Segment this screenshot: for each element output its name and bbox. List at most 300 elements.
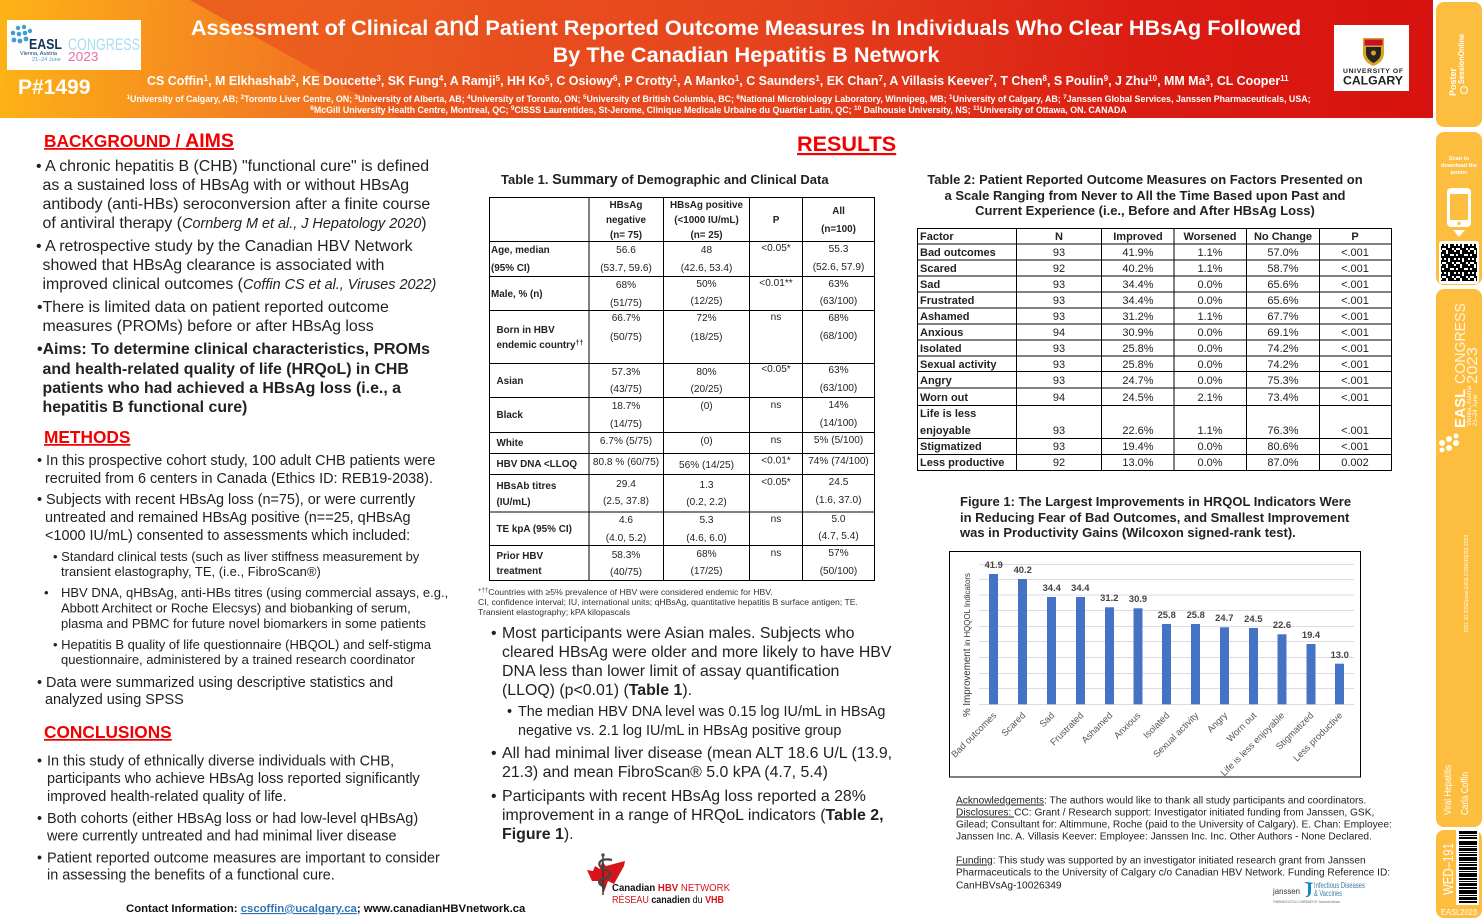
- table 2 text: 0.002: [1341, 457, 1369, 469]
- table 2 text: Isolated: [920, 343, 962, 355]
- table 1 text: 57%: [828, 548, 849, 559]
- table 1 text: <0.05*: [761, 364, 791, 375]
- table 1 text: (12/25): [691, 296, 722, 307]
- text block: conclusions bullets: Patient reported outcome measures are important to consider: [47, 850, 440, 866]
- table 1 text: 56.6: [616, 245, 636, 256]
- table 1 text: (1.6, 37.0): [815, 495, 862, 506]
- table 1 text: (42.6, 53.4): [681, 263, 732, 274]
- table 1 text: (17/25): [691, 566, 722, 577]
- table 1 text: (53.7, 59.6): [600, 263, 652, 274]
- table 2 text: 34.4%: [1122, 279, 1154, 291]
- table 2 text: 2.1%: [1197, 392, 1223, 404]
- category labels: Less productive: [1291, 710, 1344, 763]
- table 1 text: (0.2, 2.2): [686, 497, 727, 508]
- table 2 text: 1.1%: [1197, 425, 1223, 437]
- table 1 text: (63/100): [820, 296, 857, 307]
- table 1 text: (n=100): [821, 224, 856, 235]
- table 1 footnote: CI, confidence interval; IU, international units; qHBsAg, quantitative hepatitis B surface antigen; TE.: [478, 597, 858, 607]
- data labels: 30.9: [1129, 593, 1147, 604]
- table 1 text: HBsAg positive: [670, 200, 743, 211]
- panel: conclusions: [37, 722, 440, 884]
- table 2 text: 0.0%: [1197, 441, 1223, 453]
- text block: methods bullets: • Subjects with recent HBsAg loss (n=75), or were currently: [37, 492, 416, 508]
- data labels: 34.4: [1071, 582, 1090, 593]
- table 2 title: Table 2: Patient Reported Outcome Measures on Factors Presented on: [927, 172, 1363, 187]
- title: By The Canadian Hepatitis B Network: [553, 42, 940, 67]
- affiliations: 1University of Calgary, AB; 2Toronto Liver Centre, ON; 3University of Alberta, AB; 4University of Toronto, ON; 5University of British Columbia, BC; 6National Microbiology Laboratory, Winnipeg, MB; 1University of Calgary, AB; 7Janssen Global Services, Janssen Pharmaceuticals, USA;: [126, 94, 1311, 104]
- table 2 text: Factor: [920, 231, 954, 243]
- table 1 text: HBsAg: [610, 200, 642, 211]
- table 2 text: 24.7%: [1122, 375, 1154, 387]
- text block: methods bullets: • Hepatitis B quality of life questionnaire (HBQOL) and self-stigma: [53, 637, 432, 652]
- logo: EASL Congress 2023: 2023: [68, 49, 98, 64]
- table 2 text: Worsened: [1184, 231, 1236, 243]
- bars: [989, 574, 1344, 704]
- table 2 text: 65.6%: [1267, 279, 1299, 291]
- data labels: 40.2: [1014, 564, 1032, 575]
- table 2 text: 31.2%: [1122, 311, 1154, 323]
- table 2 text: 94: [1053, 327, 1065, 339]
- text block: results bullets: Participants with recent HBsAg loss reported a 28%: [502, 788, 866, 805]
- text block: funding: Funding: This study was supported by an investigator initiated research grant from Janssen: [956, 856, 1366, 866]
- table 1 text: HBsAb titres: [496, 481, 557, 492]
- table 1 text: Born in HBV: [496, 325, 555, 336]
- table 2 text: 25.8%: [1122, 359, 1154, 371]
- table 2 grid: [918, 228, 1392, 470]
- panel: EASL congress: 21–24 June: [1473, 394, 1479, 426]
- table 2 text: P: [1351, 231, 1359, 243]
- logo: Canadian HBV Network: [587, 853, 730, 906]
- category labels: Stigmatized: [1274, 710, 1315, 752]
- data labels: 13.0: [1331, 649, 1349, 660]
- text block: results bullets: cleared HBsAg were older and more likely to have HBV: [502, 644, 892, 661]
- panel: background and aims: [36, 130, 436, 416]
- data labels: 22.6: [1273, 619, 1291, 630]
- table 1 text: Black: [496, 410, 523, 421]
- table 1 text: 29.4: [616, 479, 636, 490]
- panel: EASL congress: [1436, 289, 1482, 827]
- table 1 text: 63%: [828, 365, 849, 376]
- table 2 text: 0.0%: [1197, 279, 1223, 291]
- data labels: 24.7: [1215, 612, 1233, 623]
- category labels: Isolated: [1141, 710, 1171, 740]
- table 1 text: 58.3%: [612, 550, 640, 561]
- table 2 text: <.001: [1341, 375, 1369, 387]
- table 2 text: 93: [1053, 343, 1065, 355]
- table 1 text: 72%: [696, 313, 717, 324]
- panel: EASL congress: Carla Coffin: [1459, 772, 1471, 815]
- table 2 text: 25.8%: [1122, 343, 1154, 355]
- text block: methods bullets: recruited from 6 centers in Canada (Ethics ID: REB19-2038).: [45, 471, 433, 487]
- table 2 text: <.001: [1341, 279, 1369, 291]
- panel: table 1: [478, 172, 874, 617]
- table 1 text: (52.6, 57.9): [813, 262, 864, 273]
- table 2 text: 57.0%: [1267, 247, 1299, 259]
- table 1 text: TE kpA (95% CI): [496, 524, 572, 535]
- text block: acknowledgements and disclosures: [956, 796, 1392, 842]
- panel: methods: [37, 427, 448, 708]
- table 1 text: <0.01*: [761, 456, 791, 466]
- logo: Janssen: PHARMACEUTICAL COMPANIES OF Johnson&Johnson: [1273, 900, 1340, 904]
- table 1 text: Age, median: [491, 245, 550, 256]
- text block: background bullets: • A chronic hepatitis B (CHB) "functional cure" is defined: [36, 158, 429, 175]
- table 1 text: 80.8 % (60/75): [593, 457, 659, 468]
- heading: methods: METHODS: [44, 427, 130, 447]
- table 2 text: 0.0%: [1197, 327, 1223, 339]
- text block: conclusions bullets: in assessing the benefits of a functional cure.: [47, 868, 335, 884]
- table 2 text: 58.7%: [1267, 263, 1299, 275]
- table 2 text: 92: [1053, 457, 1065, 469]
- text block: conclusions bullets: Both cohorts (either HBsAg loss or had low-level qHBsAg): [47, 811, 418, 827]
- table 2 text: 41.9%: [1122, 247, 1154, 259]
- text block: methods bullets: HBV DNA, qHBsAg, anti-HBs titres (using commercial assays, e.g.,: [61, 585, 448, 600]
- table 1 text: [491, 200, 869, 578]
- figure 1 title: Figure 1: The Largest Improvements in HRQOL Indicators Were: [960, 494, 1351, 509]
- category labels: Sexual activity: [1151, 710, 1201, 759]
- table 1 text: (51/75): [610, 298, 642, 309]
- logo: EASL Congress 2023: 21–24 June: [32, 57, 61, 63]
- table 1 text: (18/25): [691, 332, 722, 343]
- table 2 text: <.001: [1341, 263, 1369, 275]
- table 2 text: 65.6%: [1267, 295, 1299, 307]
- table 2 text: <.001: [1341, 247, 1369, 259]
- table 1 text: P: [773, 215, 780, 226]
- panel: EASL congress: DOI: 10.3252/pose.EASLCONGRESS.2023: [1464, 535, 1470, 632]
- table 1 text: White: [496, 438, 524, 449]
- figure 1 title: in Reducing Fear of Bad Outcomes, and Smallest Improvement: [960, 510, 1350, 525]
- text block: conclusions bullets: were currently untreated and had minimal liver disease: [46, 828, 397, 844]
- text block: methods bullets: untreated and remained HBsAg positive (n==25, qHBsAg: [45, 510, 411, 526]
- table 1 text: 80%: [696, 367, 717, 378]
- text block: aims: and health-related quality of life (HRQoL) in CHB: [42, 361, 409, 378]
- text block: results bullets: All had minimal liver disease (mean ALT 18.6 U/L (13.9,: [502, 745, 892, 762]
- table 1 text: 68%: [828, 313, 849, 324]
- table 1 text: ns: [771, 435, 781, 446]
- table 1 text: (2.5, 37.8): [603, 496, 649, 507]
- text block: funding: Pharmaceuticals to the University of Calgary c/o Canadian HBV Network. Funding Reference ID:: [956, 868, 1390, 878]
- table 2 text: 93: [1053, 311, 1065, 323]
- table 1 text: (4.7, 5.4): [818, 531, 859, 542]
- text block: results bullets: DNA less than lower limit of assay quantification: [502, 663, 839, 680]
- table 2 text: Stigmatized: [920, 441, 982, 453]
- table 2 text: <.001: [1341, 343, 1369, 355]
- table 1 text: <0.01**: [759, 278, 793, 289]
- panel: session code and barcode: WED–191: [1441, 843, 1457, 895]
- table 1 text: Prior HBV: [496, 551, 544, 562]
- table 1 text: (14/75): [610, 419, 642, 430]
- table 1 text: 1.3: [699, 480, 714, 491]
- table 2 text: 93: [1053, 441, 1065, 453]
- table 2 text: 0.0%: [1197, 375, 1223, 387]
- table 1 text: (43/75): [610, 384, 642, 395]
- table 2 text: 93: [1053, 375, 1065, 387]
- panel: EASL congress: 2023: [1465, 347, 1481, 384]
- table 1 text: Asian: [496, 376, 523, 387]
- panel: EASL congress: EASL: [1453, 389, 1469, 428]
- text block: results bullets: •: [491, 788, 497, 805]
- table 2 text: [920, 231, 1369, 469]
- table 2 text: 80.6%: [1267, 441, 1299, 453]
- table 1 text: (68/100): [820, 331, 857, 342]
- table 2 text: 0.0%: [1197, 359, 1223, 371]
- table 2 text: <.001: [1341, 327, 1369, 339]
- data labels: 19.4: [1302, 629, 1321, 640]
- table 1 text: 68%: [696, 549, 717, 560]
- table 2 text: 0.0%: [1197, 457, 1223, 469]
- category labels: [949, 710, 1344, 778]
- table 1 text: 6.7% (5/75): [600, 436, 652, 447]
- table 1 footnote: +††Countries with ≥5% prevalence of HBV were considered endemic for HBV.: [478, 587, 773, 597]
- text block: background bullets: [36, 158, 436, 335]
- table 2 text: 94: [1053, 392, 1065, 404]
- logo: EASL Congress 2023: EASL: [29, 36, 62, 53]
- table 2 text: Sexual activity: [920, 359, 997, 371]
- text block: background bullets: showed that HBsAg clearance is associated with: [42, 257, 384, 274]
- table 2 text: <.001: [1341, 425, 1369, 437]
- logo: University of Calgary: CALGARY: [1343, 74, 1403, 88]
- text block: funding: [956, 856, 1390, 892]
- table 2 text: 87.0%: [1267, 457, 1299, 469]
- authors: CS Coffin1, M Elkhashab2, KE Doucette3, SK Fung4, A Ramji5, HH Ko5, C Osiowy6, P Crotty1, A Manko1, C Saunders1, EK Chan7, A Villasis Keever7, T Chen8, S Poulin9, J Zhu10, MM Ma3, CL Cooper11: [147, 74, 1289, 88]
- text block: methods bullets: questionnaire, administered by a trained research coordinator: [61, 652, 416, 667]
- logo: University of Calgary: [1334, 25, 1409, 91]
- text block: results bullets: [491, 625, 892, 843]
- text block: conclusions bullets: [37, 754, 440, 884]
- table 2 text: Improved: [1113, 231, 1163, 243]
- text block: methods bullets: •: [44, 585, 49, 600]
- data labels: 24.5: [1244, 613, 1262, 624]
- text block: methods bullets: • In this prospective cohort study, 100 adult CHB patients were: [37, 453, 435, 469]
- table 1 text: 55.3: [829, 244, 849, 255]
- panel: EASL congress: Vienna, Austria: [1467, 385, 1473, 426]
- text block: results bullets: •: [491, 625, 497, 642]
- text block: acknowledgements and disclosures: Janssen Inc. A. Villasis Keever: Employee: Janssen Inc. Inc. Other Authors - None Declared.: [956, 832, 1372, 842]
- table 1 text: 74% (74/100): [808, 456, 869, 467]
- table 2 text: <.001: [1341, 311, 1369, 323]
- category labels: Anxious: [1112, 710, 1143, 741]
- table 2 text: Less productive: [920, 457, 1004, 469]
- table 2 text: N: [1055, 231, 1063, 243]
- table 1 text: ns: [771, 514, 781, 525]
- table 2 text: Frustrated: [920, 295, 974, 307]
- table 1 text: All: [832, 206, 845, 217]
- table 2 text: 1.1%: [1197, 247, 1223, 259]
- table 2 text: Sad: [920, 279, 940, 291]
- logo: Canadian HBV Network: RÉSEAU canadien du VHB: [612, 893, 724, 906]
- table 1 text: (50/100): [820, 566, 857, 577]
- table 2 text: 93: [1053, 279, 1065, 291]
- logo: EASL Congress 2023: [7, 20, 141, 70]
- table 2 text: 1.1%: [1197, 263, 1223, 275]
- table 2 text: <.001: [1341, 295, 1369, 307]
- data labels: [985, 559, 1349, 660]
- table 2 text: <.001: [1341, 392, 1369, 404]
- panel: EASL congress: CONGRESS: [1453, 303, 1469, 384]
- logo: Janssen: & Vaccines: [1314, 889, 1342, 898]
- text block: acknowledgements and disclosures: Gilead; Consultant for: Altimmune, Roche (paid to the University of Calgary). E. Chan: Employee:: [956, 820, 1392, 830]
- text block: conclusions bullets: improved health-related quality of life.: [47, 789, 287, 805]
- table 2 text: 93: [1053, 295, 1065, 307]
- data labels: 34.4: [1043, 582, 1062, 593]
- table 1 text: 24.5: [829, 477, 849, 488]
- table 2 text: 40.2%: [1122, 263, 1154, 275]
- table 2 text: 30.9%: [1122, 327, 1154, 339]
- table 1 title: Table 1. Summary of Demographic and Clinical Data: [501, 172, 829, 188]
- table 2 text: 24.5%: [1122, 392, 1154, 404]
- text block: conclusions bullets: •: [37, 850, 42, 866]
- text block: results bullets: (LLOQ) (p<0.01) (Table 1).: [502, 682, 692, 699]
- panel: session code and barcode: EASL2023: [1441, 907, 1477, 917]
- table 2 title: a Scale Ranging from Never to All the Time Based upon Past and: [945, 188, 1346, 203]
- table 2 text: 69.1%: [1267, 327, 1299, 339]
- table 2 text: 13.0%: [1122, 457, 1154, 469]
- table 2 text: 0.0%: [1197, 343, 1223, 355]
- data labels: 31.2: [1100, 592, 1118, 603]
- table 2 title: Current Experience (i.e., Before and After HBsAg Loss): [975, 203, 1315, 218]
- table 2 text: <.001: [1341, 441, 1369, 453]
- heading: conclusions: CONCLUSIONS: [44, 722, 172, 742]
- table 2 text: 74.2%: [1267, 359, 1299, 371]
- text block: background bullets: •There is limited data on patient reported outcome: [37, 299, 389, 316]
- table 1 text: (n= 75): [610, 230, 642, 241]
- table 1 text: endemic country††: [496, 340, 583, 351]
- bar chart: [949, 552, 1360, 778]
- table 2 text: 93: [1053, 247, 1065, 259]
- table 1 text: (4.6, 6.0): [686, 533, 727, 544]
- table 1 text: negative: [606, 215, 647, 226]
- table 1 text: 63%: [828, 279, 849, 290]
- text block: aims: hepatitis B functional cure): [42, 399, 247, 416]
- table 2 text: 75.3%: [1267, 375, 1299, 387]
- category labels: Scared: [1000, 710, 1027, 738]
- text block: methods bullets: • Data were summarized using descriptive statistics and: [37, 675, 393, 691]
- table 1 text: 50%: [696, 279, 717, 290]
- table 1 text: ns: [771, 548, 781, 559]
- title: [191, 11, 1301, 67]
- table 2 text: 67.7%: [1267, 311, 1299, 323]
- y axis title: % Improvement in HQQOL Indicators: [962, 573, 973, 717]
- table 2 text: 76.3%: [1267, 425, 1299, 437]
- logo: EASL Congress 2023: CONGRESS: [68, 36, 140, 54]
- text block: methods bullets: [37, 453, 448, 708]
- text block: methods bullets: plasma and PBMC for future novel biomarkers in some patients: [61, 616, 426, 631]
- table 2 text: 93: [1053, 425, 1065, 437]
- sidebar: [1436, 2, 1482, 918]
- text block: aims: [37, 341, 430, 416]
- logo: Janssen: janssen: [1272, 886, 1300, 896]
- table 1 text: <0.05*: [761, 477, 791, 488]
- table 2 text: 93: [1053, 359, 1065, 371]
- table 2 text: Life is less: [920, 408, 976, 420]
- table 2 text: Anxious: [920, 327, 963, 339]
- panel: poster session online: [1436, 2, 1482, 127]
- logo: Canadian HBV Network: Canadian HBV NETWORK: [612, 882, 730, 894]
- panel: scan to download: [1436, 132, 1482, 285]
- table 1 text: 66.7%: [612, 313, 640, 324]
- panel: EASL congress: Viral Hepatitis: [1442, 765, 1454, 815]
- table 1 text: (20/25): [691, 384, 722, 395]
- figure 1 title: [959, 494, 1351, 540]
- table 2 text: Worn out: [920, 392, 968, 404]
- table 2 text: Scared: [920, 263, 957, 275]
- panel: scan to download: download the: [1441, 163, 1477, 169]
- category labels: Angry: [1205, 710, 1230, 735]
- table 2 text: enjoyable: [920, 425, 971, 437]
- text block: background bullets: • A retrospective study by the Canadian HBV Network: [36, 238, 413, 255]
- text block: methods bullets: transient elastography, TE, (i.e., FibroScan®): [61, 564, 321, 579]
- table 1 text: (14/100): [820, 418, 857, 429]
- table 2 text: 1.1%: [1197, 311, 1223, 323]
- table 1 text: <0.05*: [761, 243, 791, 254]
- figure 1 title: was in Productivity Gains (Wilcoxon signed-rank test).: [959, 525, 1296, 540]
- table 2 text: No Change: [1254, 231, 1312, 243]
- panel: figure 1: [949, 494, 1360, 778]
- text block: acknowledgements and disclosures: Disclosures: CC: Grant / Research support: Investigator initiated funding from Janssen, GSK,: [956, 808, 1374, 818]
- table 1 text: ns: [771, 312, 781, 323]
- table 1 text: 5.3: [699, 515, 714, 526]
- text block: background bullets: as a sustained loss of HBsAg with or without HBsAg: [42, 177, 409, 194]
- panel: table 2: [918, 172, 1392, 470]
- table 2 text: 34.4%: [1122, 295, 1154, 307]
- panel: session code and barcode: [1436, 830, 1482, 918]
- text block: results bullets: improvement in a range of HRQoL indicators (Table 2,: [502, 807, 884, 824]
- panel: scan to download: poster: [1450, 170, 1468, 176]
- text block: aims: •Aims: To determine clinical characteristics, PROMs: [37, 341, 430, 358]
- contact information: Contact Information: cscoffin@ucalgary.ca; www.canadianHBVnetwork.ca: [126, 903, 526, 915]
- panel: poster session online: SessionOnline: [1457, 34, 1466, 84]
- table 1 text: (63/100): [820, 383, 857, 394]
- table 1 text: 68%: [616, 280, 636, 291]
- table 1 text: (0): [700, 436, 713, 447]
- data labels: 25.8: [1187, 609, 1205, 620]
- text block: results bullets: Most participants were Asian males. Subjects who: [502, 625, 855, 642]
- table 1 text: Male, % (n): [491, 289, 543, 300]
- table 1 text: (95% CI): [491, 263, 530, 274]
- category labels: Ashamed: [1080, 710, 1114, 745]
- table 1 grid: [490, 198, 874, 580]
- logo: Janssen: Infectious Diseases: [1314, 881, 1365, 890]
- heading: background / aims: BACKGROUND / AIMS: [44, 130, 234, 152]
- table 1 text: 14%: [828, 400, 849, 411]
- table 1 text: 5.0: [831, 514, 846, 525]
- table 1 text: (n= 25): [690, 230, 723, 241]
- table 2 text: 0.0%: [1197, 295, 1223, 307]
- text block: results bullets: Figure 1).: [502, 826, 574, 843]
- table 1 text: 5% (5/100): [814, 435, 863, 446]
- table 1 text: 48: [701, 245, 712, 256]
- category labels: Bad outcomes: [949, 710, 999, 759]
- poster number: P#1499: [18, 76, 90, 99]
- text block: funding: CanHBVsAg-10026349: [956, 880, 1062, 892]
- title: Assessment of Clinical and Patient Reported Outcome Measures In Individuals Who Clear HBsAg Followed: [191, 11, 1301, 41]
- table 1 text: HBV DNA <LLOQ: [496, 459, 577, 470]
- table 2 text: 22.6%: [1122, 425, 1154, 437]
- table 1 text: (4.0, 5.2): [606, 533, 646, 544]
- text block: conclusions bullets: participants who achieve HBsAg loss reported significantly: [47, 771, 421, 787]
- text block: background bullets: measures (PROMs) before or after HBsAg loss: [42, 318, 374, 335]
- table 1 footnote: Transient elastography; kPA kilopascals: [478, 607, 631, 617]
- table 2 text: Ashamed: [920, 311, 970, 323]
- table 1 text: (40/75): [610, 567, 642, 578]
- logo: Janssen: [1272, 881, 1365, 904]
- affiliations: [126, 94, 1311, 115]
- text block: background bullets: of antiviral therapy (Cornberg M et al., J Hepatology 2020): [42, 215, 427, 232]
- header banner: [0, 0, 1433, 118]
- text block: aims: patients who had achieved a HBsAg loss (i.e., a: [42, 380, 401, 397]
- affiliations: 8McGill University Health Centre, Montreal, QC; 9CISSS Laurentides, St-Jerome, Clinique Medicale Urbaine du Quartier Latin, QC; 10 Dalhousie University, NS; 11University of Ottawa, ON. CANADA: [310, 104, 1127, 115]
- heading: results: RESULTS: [797, 131, 896, 156]
- table 2 text: 92: [1053, 263, 1065, 275]
